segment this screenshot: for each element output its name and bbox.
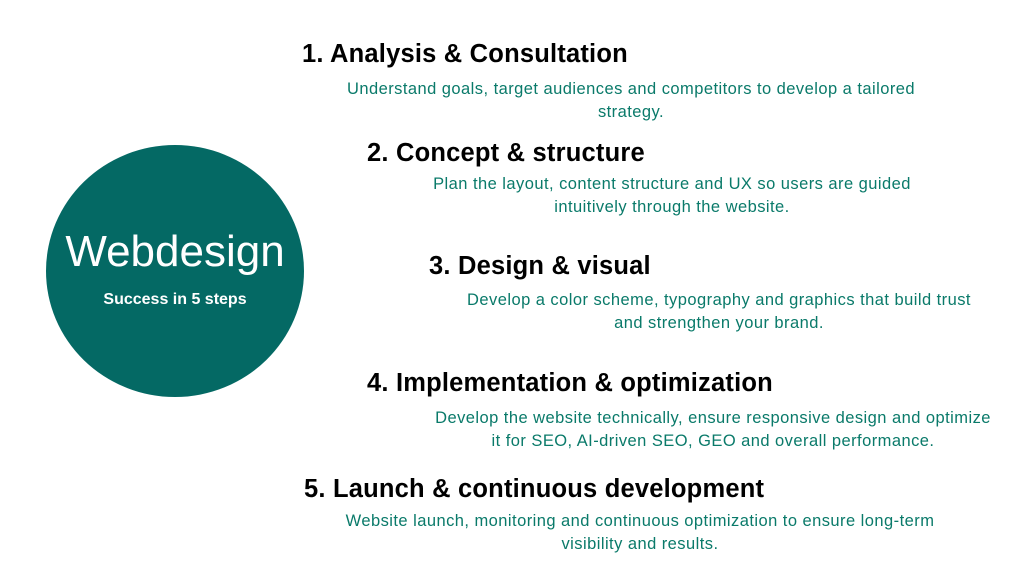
step 1 text: strategy. (598, 103, 664, 121)
step 1 text: Understand goals, target audiences and competitors to develop a tailored (347, 80, 915, 98)
step 3 heading: 3. Design & visual (429, 252, 651, 280)
step 5 text: visibility and results. (561, 535, 719, 553)
step 4 heading: 4. Implementation & optimization (367, 369, 773, 397)
step 5 text (346, 512, 934, 553)
step 3 text: Develop a color scheme, typography and graphics that build trust (467, 291, 971, 309)
step 2 text: intuitively through the website. (554, 198, 790, 216)
step 2 text: Plan the layout, content structure and UX so users are guided (433, 175, 911, 193)
step 4 text: Develop the website technically, ensure responsive design and optimize (435, 409, 991, 427)
circle title: Webdesign (65, 227, 285, 276)
step 2 text (433, 175, 911, 216)
step 5 text: Website launch, monitoring and continuous optimization to ensure long-term (346, 512, 934, 530)
step 4 text: it for SEO, AI-driven SEO, GEO and overall performance. (492, 432, 934, 450)
step 3 text (467, 291, 971, 332)
step 3 text: and strengthen your brand. (614, 314, 824, 332)
step 1 heading: 1. Analysis & Consultation (302, 40, 628, 68)
circle: Webdesign (46, 145, 304, 397)
circle subtitle: Success in 5 steps (103, 291, 247, 308)
step 5 heading: 5. Launch & continuous development (304, 475, 764, 503)
step 4 text (435, 409, 991, 450)
step 1 text (347, 80, 915, 121)
step 2 heading: 2. Concept & structure (367, 139, 645, 167)
